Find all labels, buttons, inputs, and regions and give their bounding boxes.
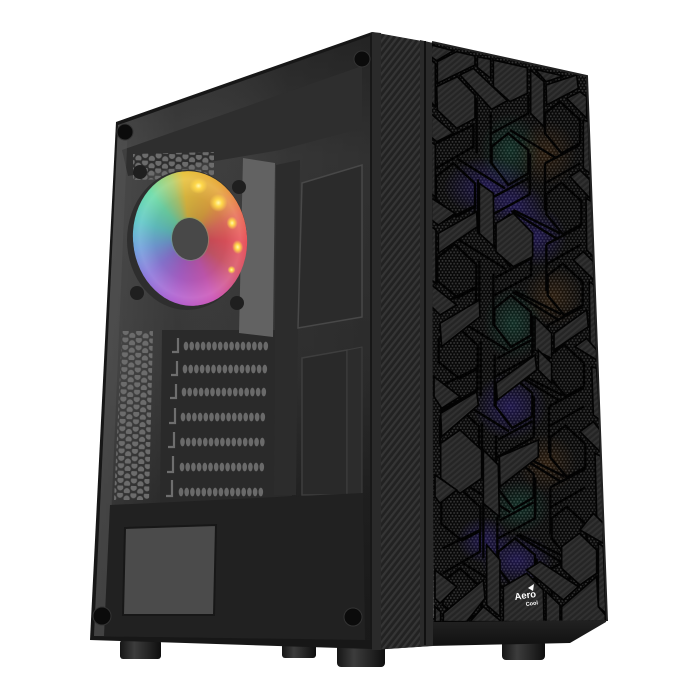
rgb glow behind mesh xyxy=(449,122,576,582)
cable column xyxy=(274,160,300,495)
front panel xyxy=(430,40,610,638)
rear edge highlight xyxy=(94,124,128,636)
lower drive panel xyxy=(302,347,362,495)
mesh xyxy=(430,40,610,623)
hexagon lattice frame xyxy=(436,95,587,638)
grey bracket xyxy=(239,158,275,337)
brand logo xyxy=(514,584,539,608)
feet xyxy=(120,640,545,667)
carbon lower panels xyxy=(434,350,606,622)
brand logo: Cool xyxy=(525,600,539,608)
icon: rgb fan xyxy=(126,165,254,312)
expansion slot perforations xyxy=(179,342,268,496)
rear vent holes xyxy=(114,331,153,500)
fan mounting screws xyxy=(127,165,247,310)
top vent holes xyxy=(133,152,214,180)
top dark band inside the chassis xyxy=(122,66,362,176)
side glass panel xyxy=(90,32,372,649)
carbon upper panels xyxy=(431,45,597,360)
slot brackets xyxy=(166,338,178,496)
brand logo: Aero xyxy=(514,589,537,603)
bottom bevel xyxy=(372,618,607,650)
front panel outer edge xyxy=(432,42,607,621)
psu shroud xyxy=(104,493,365,640)
side panel thumb screws xyxy=(93,51,370,626)
upper drive panel xyxy=(298,165,362,328)
pc case product illustration xyxy=(90,32,608,667)
motherboard tray xyxy=(160,330,292,505)
carbon side pillar xyxy=(372,32,433,650)
psu window xyxy=(123,525,216,615)
